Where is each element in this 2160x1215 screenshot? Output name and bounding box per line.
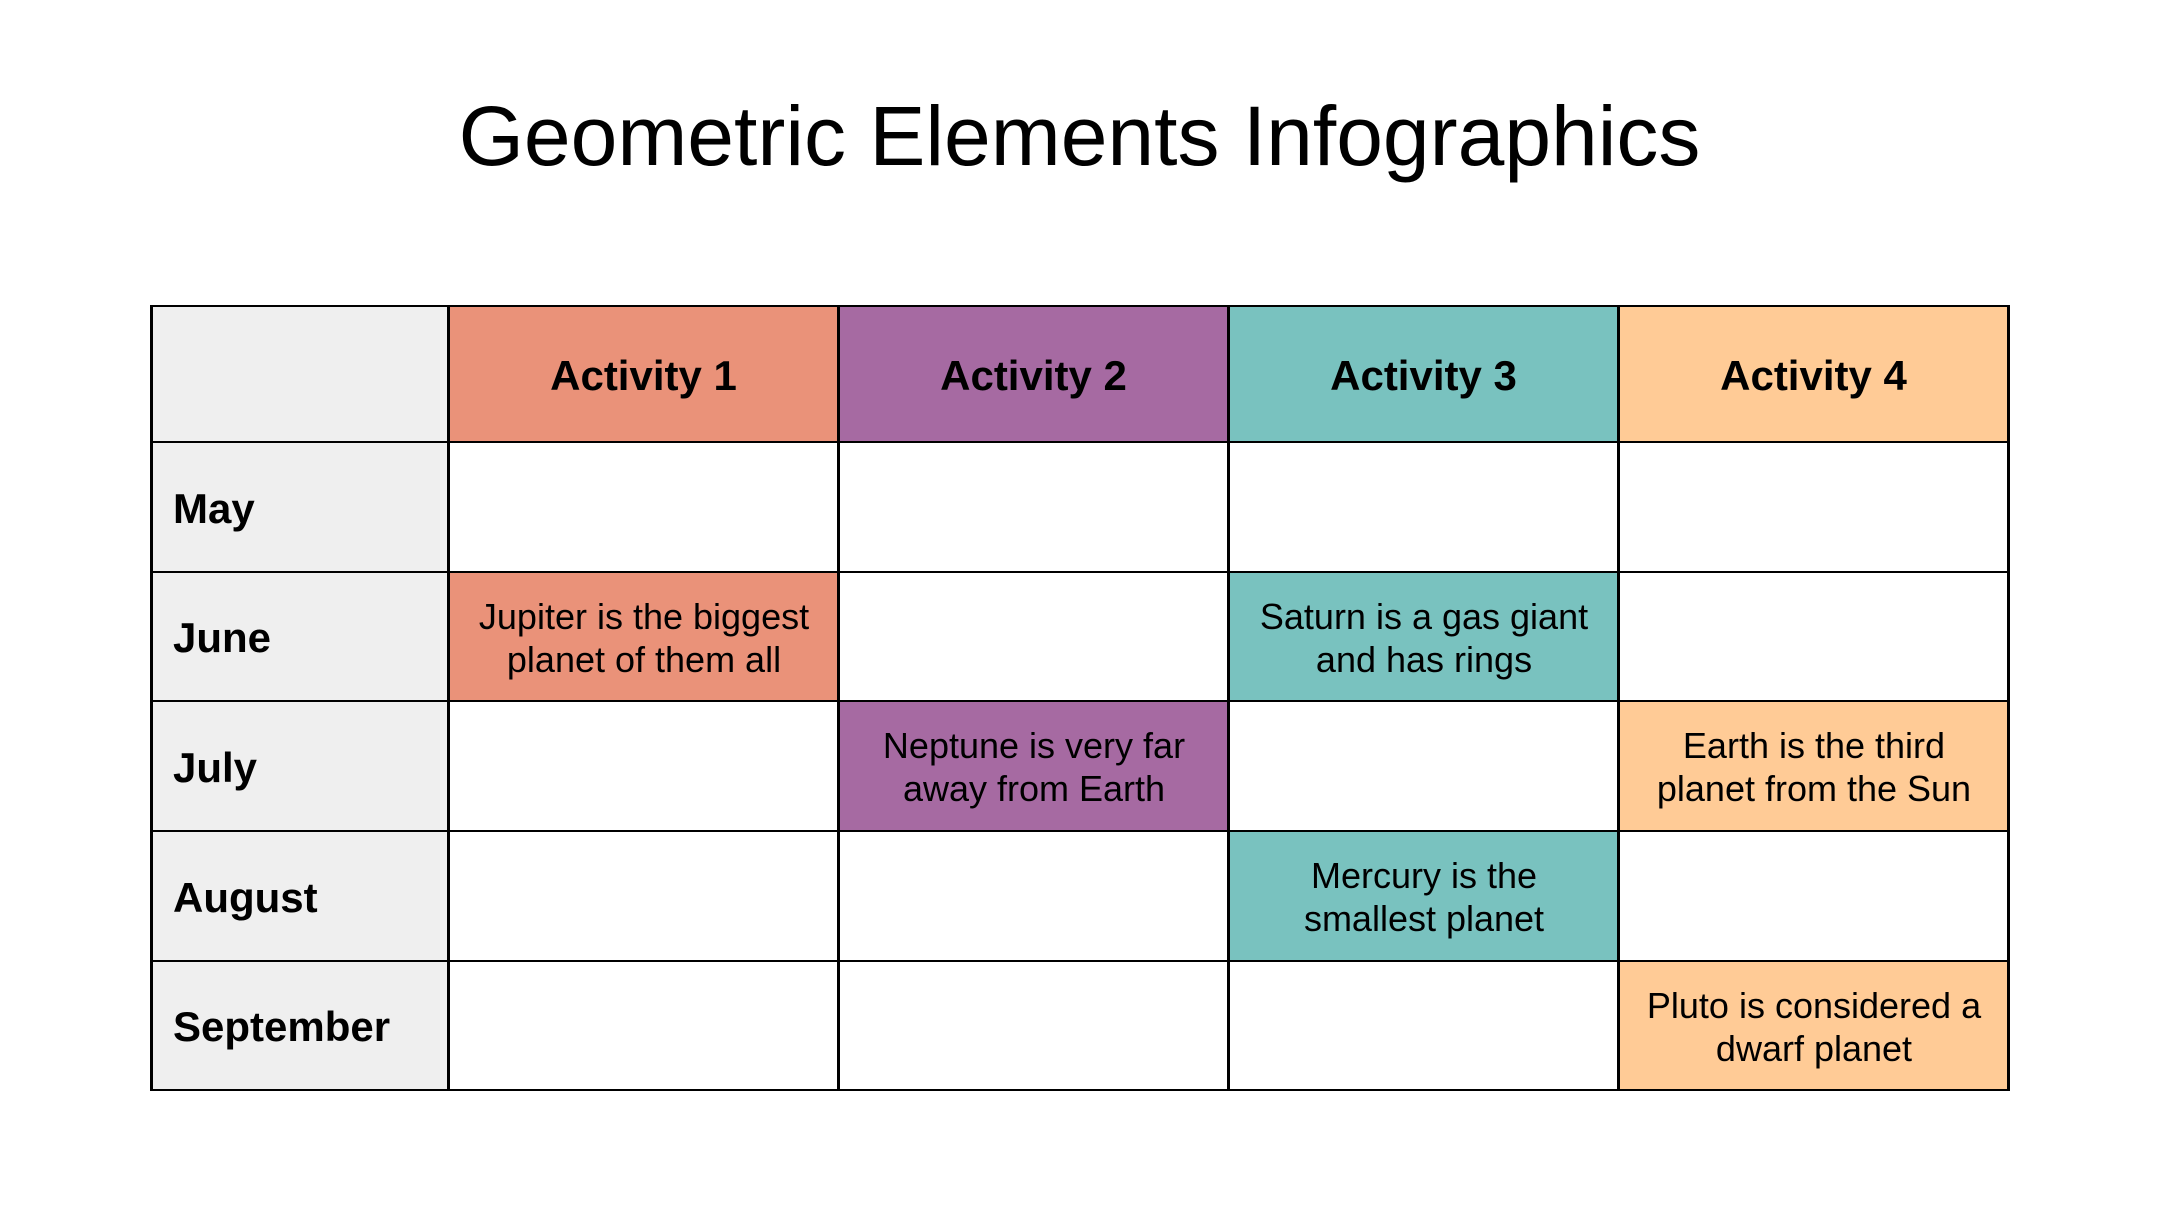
row label: July: July bbox=[173, 744, 257, 790]
cell: Jupiter: Jupiter is the biggest bbox=[479, 596, 809, 636]
header: Activity 1: Activity 1 bbox=[550, 352, 737, 398]
row label: September bbox=[150, 960, 450, 1091]
cell: Saturn: and has rings bbox=[1316, 638, 1532, 680]
cell: Jupiter: planet of them all bbox=[507, 638, 781, 680]
row label: June bbox=[150, 571, 450, 702]
header: Activity 1 bbox=[447, 305, 840, 443]
row label: May: May bbox=[173, 484, 255, 532]
cell: Saturn: Saturn is a gas giant bbox=[1260, 596, 1588, 636]
cell: Neptune: Neptune is very far bbox=[883, 725, 1185, 766]
cell: Saturn bbox=[1227, 571, 1620, 702]
cell: Earth: Earth is the third bbox=[1683, 725, 1945, 766]
cell: Pluto: dwarf planet bbox=[1716, 1028, 1912, 1068]
header: Activity 2: Activity 2 bbox=[940, 352, 1127, 398]
cell: Mercury: Mercury is the bbox=[1311, 855, 1537, 896]
cell: Mercury bbox=[1227, 830, 1620, 962]
cell: Earth bbox=[1617, 700, 2010, 832]
row label: September: September bbox=[173, 1003, 390, 1050]
cell: Mercury: smallest planet bbox=[1304, 898, 1544, 939]
cell: Neptune bbox=[837, 700, 1230, 832]
row label: July bbox=[150, 700, 450, 832]
cell: Pluto: Pluto is considered a bbox=[1647, 984, 1981, 1026]
cell: Earth: planet from the Sun bbox=[1657, 768, 1971, 809]
header: Activity 4 bbox=[1617, 305, 2010, 443]
row label: August: August bbox=[173, 874, 318, 920]
cell: Pluto bbox=[1617, 960, 2010, 1091]
empty corner cell bbox=[150, 305, 450, 443]
cell: Jupiter bbox=[447, 571, 840, 702]
cell: Neptune: away from Earth bbox=[903, 768, 1165, 809]
header: Activity 3: Activity 3 bbox=[1330, 352, 1517, 398]
header: Activity 4: Activity 4 bbox=[1720, 352, 1907, 398]
title: Geometric Elements Infographics bbox=[459, 89, 1700, 183]
header: Activity 2 bbox=[837, 305, 1230, 443]
row label: June: June bbox=[173, 614, 271, 661]
header: Activity 3 bbox=[1227, 305, 1620, 443]
row label: May bbox=[150, 441, 450, 573]
row label: August bbox=[150, 830, 450, 962]
